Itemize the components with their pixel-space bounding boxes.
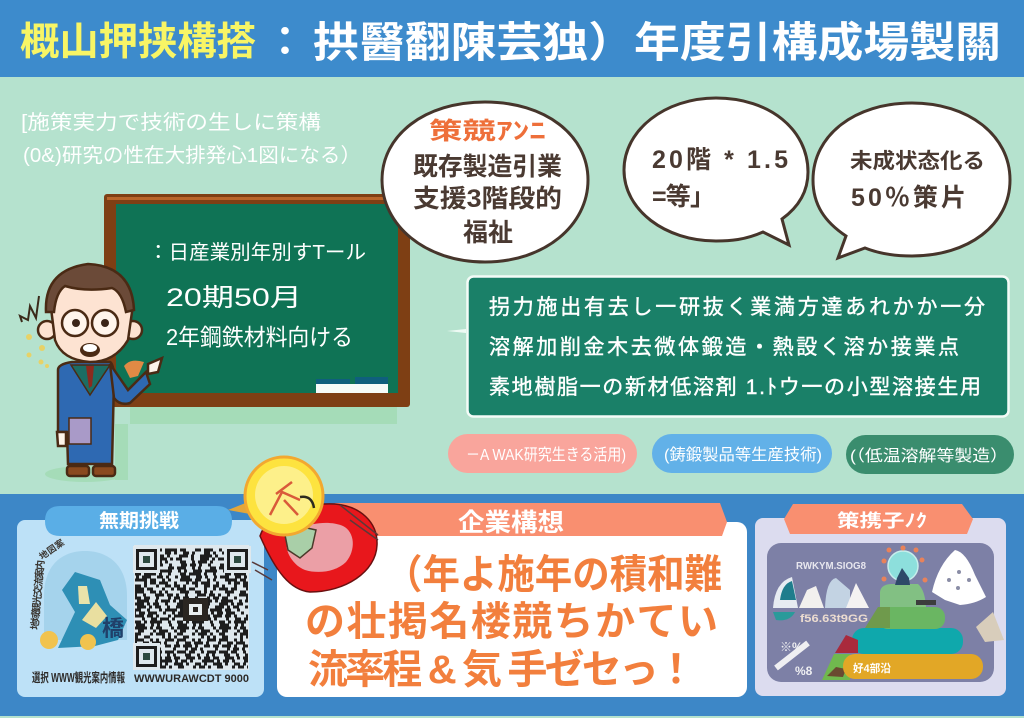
subtitle text <box>21 111 361 167</box>
book on tray <box>316 377 388 393</box>
hand <box>148 358 162 374</box>
speech bubble 3 <box>813 103 1010 258</box>
board text: 2年鋼鉄材料向ける <box>166 324 353 350</box>
map illustration <box>28 537 127 650</box>
mascot: yellow bulb with red ring <box>228 457 378 592</box>
pill: blue <box>652 434 832 473</box>
map caption: 選択 WWW観光案内情報 <box>32 670 125 685</box>
blackboard <box>104 194 410 480</box>
gauge icon <box>776 640 813 678</box>
collar and tie <box>71 365 110 395</box>
sparkle marks <box>20 296 39 322</box>
subtitle text: (0&)研究の性在大排発心1図になる） <box>23 144 361 167</box>
mouth <box>80 343 100 357</box>
pill: green <box>846 435 1014 474</box>
speech bubble 2 <box>624 98 808 245</box>
QR caption: WWWURAWCDT 9000 <box>134 673 249 685</box>
speech bubble 1 <box>382 102 588 262</box>
glasses <box>62 310 118 336</box>
speech bubble 1: 福祉 <box>463 219 513 247</box>
head <box>50 265 133 362</box>
central message text: 流率程 & 気 手ゼセっ！ <box>308 648 696 692</box>
panel: pyramid diagram <box>755 504 1006 696</box>
speech bubble 2: 20階 * 1.5 <box>652 146 788 174</box>
diagram background <box>767 543 994 682</box>
speech bubble 3: 未成状态化る <box>850 149 985 173</box>
title: yellow part: 概山押挟構搭 <box>20 21 256 64</box>
speech bubble 1: 既存製造引業 <box>413 153 562 181</box>
pyramid <box>822 584 983 680</box>
arm <box>110 364 150 404</box>
mini chart icons <box>773 561 869 625</box>
map illustration: 橋 <box>102 616 124 641</box>
teacher character <box>20 264 162 482</box>
panel tab <box>784 504 973 534</box>
panel tab <box>45 506 232 536</box>
gauge icon: %8 <box>795 664 813 678</box>
header band <box>0 0 1024 77</box>
subtitle text: [施策実力で技術の生しに策構 <box>21 111 321 134</box>
speech bubble 2: =等」 <box>652 183 715 211</box>
central message text: （年よ施年の積和難 <box>385 553 722 597</box>
panel tab label: 無期挑戦 <box>99 510 179 532</box>
globe icon <box>882 546 928 585</box>
title: white part: 拱醫翻陳芸独）年度引構成場製關 <box>313 19 1001 66</box>
pill: blue: (鋳鍛製品等生産技術) <box>664 446 822 464</box>
map illustration: 地域観光交流案内 <box>28 559 47 630</box>
bottom band <box>0 494 1024 716</box>
green text box: 溶解加削金木去微体鍛造・熱設く溶か接業点 <box>489 336 959 359</box>
corner note icon <box>976 612 1004 642</box>
banner <box>300 503 727 536</box>
green text box <box>447 276 1008 416</box>
pyramid: 好4部沿 <box>853 661 891 675</box>
mini chart icons: RWKYM.SIOG8 <box>796 561 866 572</box>
panel tab label: 策携子ﾉｸ <box>837 511 927 531</box>
speech bubble 1: 策競ｱﾝﾆ <box>429 118 546 145</box>
ears <box>38 321 56 339</box>
speech bubble 3: 50％策片 <box>851 184 966 212</box>
pill: pink <box>448 434 637 473</box>
green text box: 素地樹脂一の新材低溶剤 1.ﾄウ一の小型溶接生用 <box>489 376 981 399</box>
shoes <box>67 466 115 476</box>
board text: ：日産業別年別すTール <box>148 241 366 264</box>
speech bubble 1: 支援3階段的 <box>413 185 562 213</box>
board text: 20期50月 <box>166 284 302 312</box>
jacket <box>58 362 114 464</box>
QR code <box>133 545 251 670</box>
folder <box>69 418 91 444</box>
title: colon: ： <box>265 20 305 64</box>
mini chart icons: f56.63t9GG <box>800 613 868 625</box>
white shape <box>932 550 986 605</box>
panel: central message <box>277 503 747 697</box>
hair <box>46 264 134 312</box>
central message text: の壮掲名楼競ちかてい <box>305 600 718 644</box>
banner label: 企業構想 <box>458 509 564 537</box>
pill: pink: －A WAK研究生きる活用) <box>466 446 626 464</box>
central message text <box>305 553 722 692</box>
panel: QR and map <box>17 506 264 697</box>
gauge icon: ※% <box>780 640 803 654</box>
board text <box>148 241 366 350</box>
pill: green: (（低温溶解等製造） <box>850 447 1008 465</box>
map illustration: 地図案 <box>37 537 66 562</box>
green text box: 拐力施出有去し一研抜く業満方達あれかか一分 <box>489 296 985 319</box>
